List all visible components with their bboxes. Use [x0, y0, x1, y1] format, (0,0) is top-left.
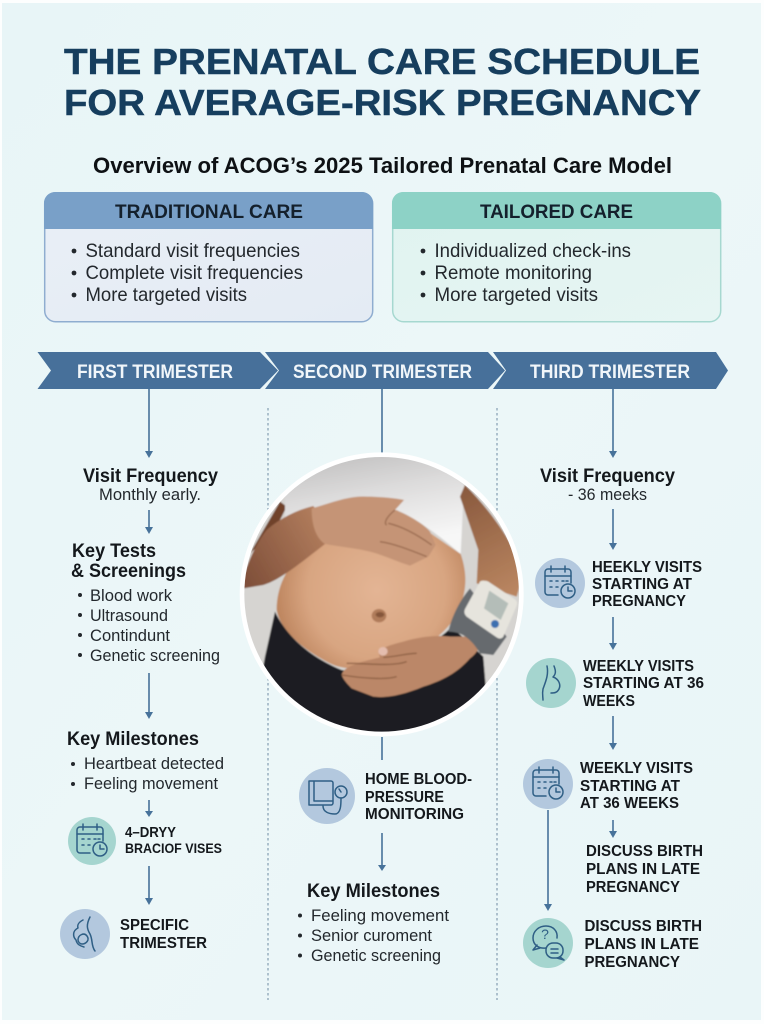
arrow	[609, 716, 617, 750]
label: 4-day practice visits: BRACIOF VISES	[125, 840, 222, 856]
list: tailored care points: Individualized check-ins	[434, 240, 631, 262]
label: specific trimester: TRIMESTER	[120, 935, 207, 952]
label: discuss birth plans: DISCUSS BIRTH	[586, 843, 703, 860]
chevron: first trimester: FIRST TRIMESTER	[77, 362, 233, 383]
icon: calendar with clock	[535, 558, 585, 608]
list: traditional care points: More targeted visits	[86, 284, 247, 306]
chevron: first trimester	[38, 352, 278, 389]
list: tailored care points: More targeted visits	[434, 284, 598, 306]
label: discuss birth plans	[586, 843, 703, 896]
arrow	[145, 673, 153, 719]
key milestones	[298, 881, 449, 965]
icon: baby in womb	[60, 909, 110, 959]
visit frequency: Monthly early.	[99, 485, 201, 504]
icon: speech bubbles	[523, 918, 573, 968]
label: weekly visits starting at 36 weeks: WEEKLY VISITS	[580, 760, 693, 777]
key tests and screenings: Ultrasound	[90, 606, 168, 625]
visit frequency: - 36 meeks	[568, 485, 647, 504]
arrow	[609, 509, 617, 550]
label: specific trimester: SPECIFIC	[120, 917, 189, 934]
label: heekly visits: STARTING AT	[592, 576, 693, 593]
key milestones: Heartbeat detected	[84, 754, 224, 773]
title: THE PRENATAL CARE SCHEDULE	[64, 41, 700, 82]
connector below photo	[381, 737, 383, 760]
arrow	[609, 617, 617, 650]
photo: pregnant belly with wrist blood-pressure monitor	[237, 450, 527, 740]
title: FOR AVERAGE-RISK PREGNANCY	[64, 82, 701, 123]
list: traditional care points: Standard visit frequencies	[86, 240, 300, 262]
key tests and screenings: & Screenings	[71, 561, 186, 582]
label: discuss birth plans	[584, 918, 702, 971]
chevron: third trimester: THIRD TRIMESTER	[530, 362, 690, 383]
visit frequency: Visit Frequency	[83, 466, 218, 487]
label: weekly visits starting at 36 weeks: AT 36 WEEKS	[580, 795, 679, 812]
visit frequency	[83, 466, 218, 504]
arrow	[145, 800, 153, 817]
label: heekly visits	[592, 559, 702, 610]
label: home blood-pressure monitoring: MONITORING	[365, 806, 464, 823]
list: tailored care points: Remote monitoring	[434, 262, 592, 284]
visit frequency	[540, 466, 675, 504]
label: specific trimester	[120, 917, 207, 952]
arrow	[145, 510, 153, 534]
icon: speech bubbles: ?	[541, 926, 549, 942]
label: 4-day practice visits: 4–DRYY	[125, 825, 176, 841]
arrow	[145, 866, 153, 905]
icon: calendar with clock	[523, 759, 573, 809]
label: weekly visits starting at 36 weeks	[583, 658, 704, 710]
arrow: long connector	[544, 810, 552, 911]
label: heekly visits: PREGNANCY	[592, 593, 687, 610]
key tests and screenings: Key Tests	[72, 541, 156, 562]
list: traditional care points: Complete visit frequencies	[86, 262, 303, 284]
panel: traditional care	[44, 192, 373, 322]
arrow: first trimester start	[145, 389, 153, 458]
key tests and screenings	[71, 541, 220, 665]
title	[64, 41, 701, 123]
label: discuss birth plans: DISCUSS BIRTH	[584, 918, 702, 935]
chevron: second trimester	[265, 352, 505, 389]
label: discuss birth plans: PREGNANCY	[584, 954, 681, 971]
arrow	[378, 833, 386, 871]
label: weekly visits starting at 36 weeks: STARTING AT	[580, 778, 681, 795]
key milestones: Key Milestones	[307, 881, 440, 902]
key milestones: Key Milestones	[67, 729, 199, 750]
key milestones: Genetic screening	[311, 946, 441, 965]
heading: traditional care: TRADITIONAL CARE	[115, 201, 303, 223]
connector: second trimester to photo	[381, 389, 383, 453]
key tests and screenings: Genetic screening	[90, 646, 220, 665]
key milestones: Feeling movement	[84, 774, 218, 793]
label: weekly visits starting at 36 weeks: WEEKS	[583, 693, 635, 710]
label: heekly visits: HEEKLY VISITS	[592, 559, 702, 576]
label: weekly visits starting at 36 weeks	[580, 760, 693, 812]
key tests and screenings: Blood work	[90, 586, 172, 605]
arrow: third trimester start	[609, 389, 617, 458]
label: weekly visits starting at 36 weeks: STARTING AT 36	[583, 675, 704, 692]
panel: tailored care	[392, 192, 721, 322]
label: home blood-pressure monitoring	[365, 771, 472, 823]
arrow	[609, 820, 617, 838]
label: home blood-pressure monitoring: HOME BLOOD-	[365, 771, 472, 788]
key milestones	[67, 729, 224, 793]
chevron: third trimester	[493, 352, 728, 389]
visit frequency: Visit Frequency	[540, 466, 675, 487]
chevron: second trimester: SECOND TRIMESTER	[293, 362, 472, 383]
icon: home blood pressure monitor	[299, 768, 355, 824]
label: 4-day practice visits	[125, 825, 222, 856]
label: discuss birth plans: PLANS IN LATE	[584, 936, 699, 953]
label: discuss birth plans: PREGNANCY	[586, 879, 681, 896]
label: weekly visits starting at 36 weeks: WEEKLY VISITS	[583, 658, 694, 675]
list: tailored care points	[421, 240, 631, 306]
column: second trimester	[298, 737, 472, 965]
key milestones: Senior curoment	[311, 926, 432, 945]
column: first trimester	[60, 466, 224, 959]
list: traditional care points	[72, 240, 303, 306]
label: discuss birth plans: PLANS IN LATE	[586, 861, 700, 878]
icon: calendar with clock	[68, 817, 116, 865]
icon: belly profile	[526, 658, 576, 708]
label: home blood-pressure monitoring: PRESSURE	[365, 789, 444, 806]
key tests and screenings: Contindunt	[90, 626, 170, 645]
heading: tailored care: TAILORED CARE	[480, 201, 633, 223]
key milestones: Feeling movement	[311, 906, 449, 925]
subtitle: Overview of ACOG’s 2025 Tailored Prenatal Care Model	[93, 153, 672, 178]
column: third trimester	[523, 466, 704, 971]
